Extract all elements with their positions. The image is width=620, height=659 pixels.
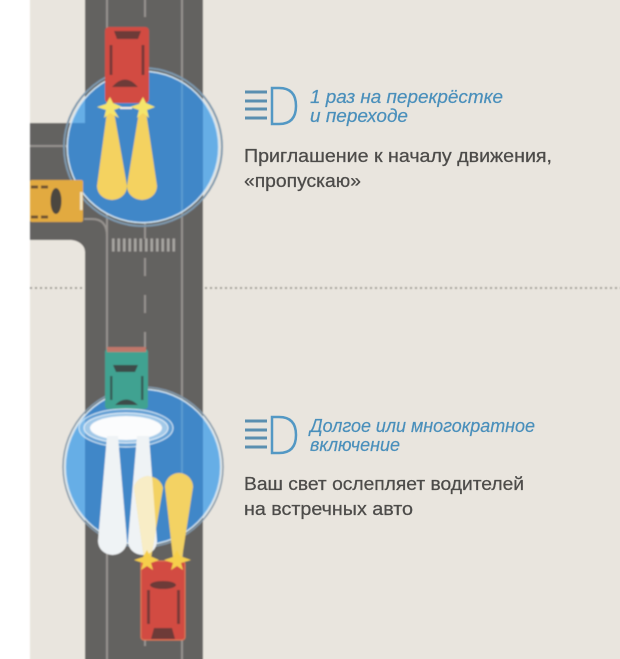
circle: bottom highlight <box>60 385 230 550</box>
text: bottom description: на встречных авто <box>244 499 413 519</box>
text: bottom description: Ваш свет ослепляет водителей <box>244 474 524 494</box>
car: red bottom <box>141 561 185 640</box>
headlight flares: bottom <box>134 550 191 570</box>
icon: headlight top <box>245 88 296 124</box>
beams: yellow top <box>97 112 157 200</box>
text: bottom description <box>244 474 524 519</box>
title: top <box>310 87 503 126</box>
title: bottom: Долгое или многократное <box>308 416 535 436</box>
headlight flares: top <box>97 97 155 118</box>
car: yellow taxi <box>30 180 83 222</box>
beams: yellow oncoming <box>134 473 193 558</box>
glare: rings around oncoming driver <box>79 409 173 447</box>
circle: top highlight <box>62 66 224 228</box>
road: vertical road with side street <box>30 0 203 659</box>
title: bottom <box>308 416 535 455</box>
title: bottom: включение <box>310 435 400 455</box>
car: red top <box>105 27 149 103</box>
title: top: 1 раз на перекрёстке <box>310 87 503 107</box>
text: top description: «пропускаю» <box>244 171 361 191</box>
text: top description: Приглашение к началу движения, <box>244 146 552 166</box>
beams: white <box>98 436 157 555</box>
car: green oncoming <box>105 347 148 409</box>
icon: headlight bottom <box>245 417 296 453</box>
title: top: и переходе <box>310 106 408 126</box>
text: top description <box>244 146 552 191</box>
